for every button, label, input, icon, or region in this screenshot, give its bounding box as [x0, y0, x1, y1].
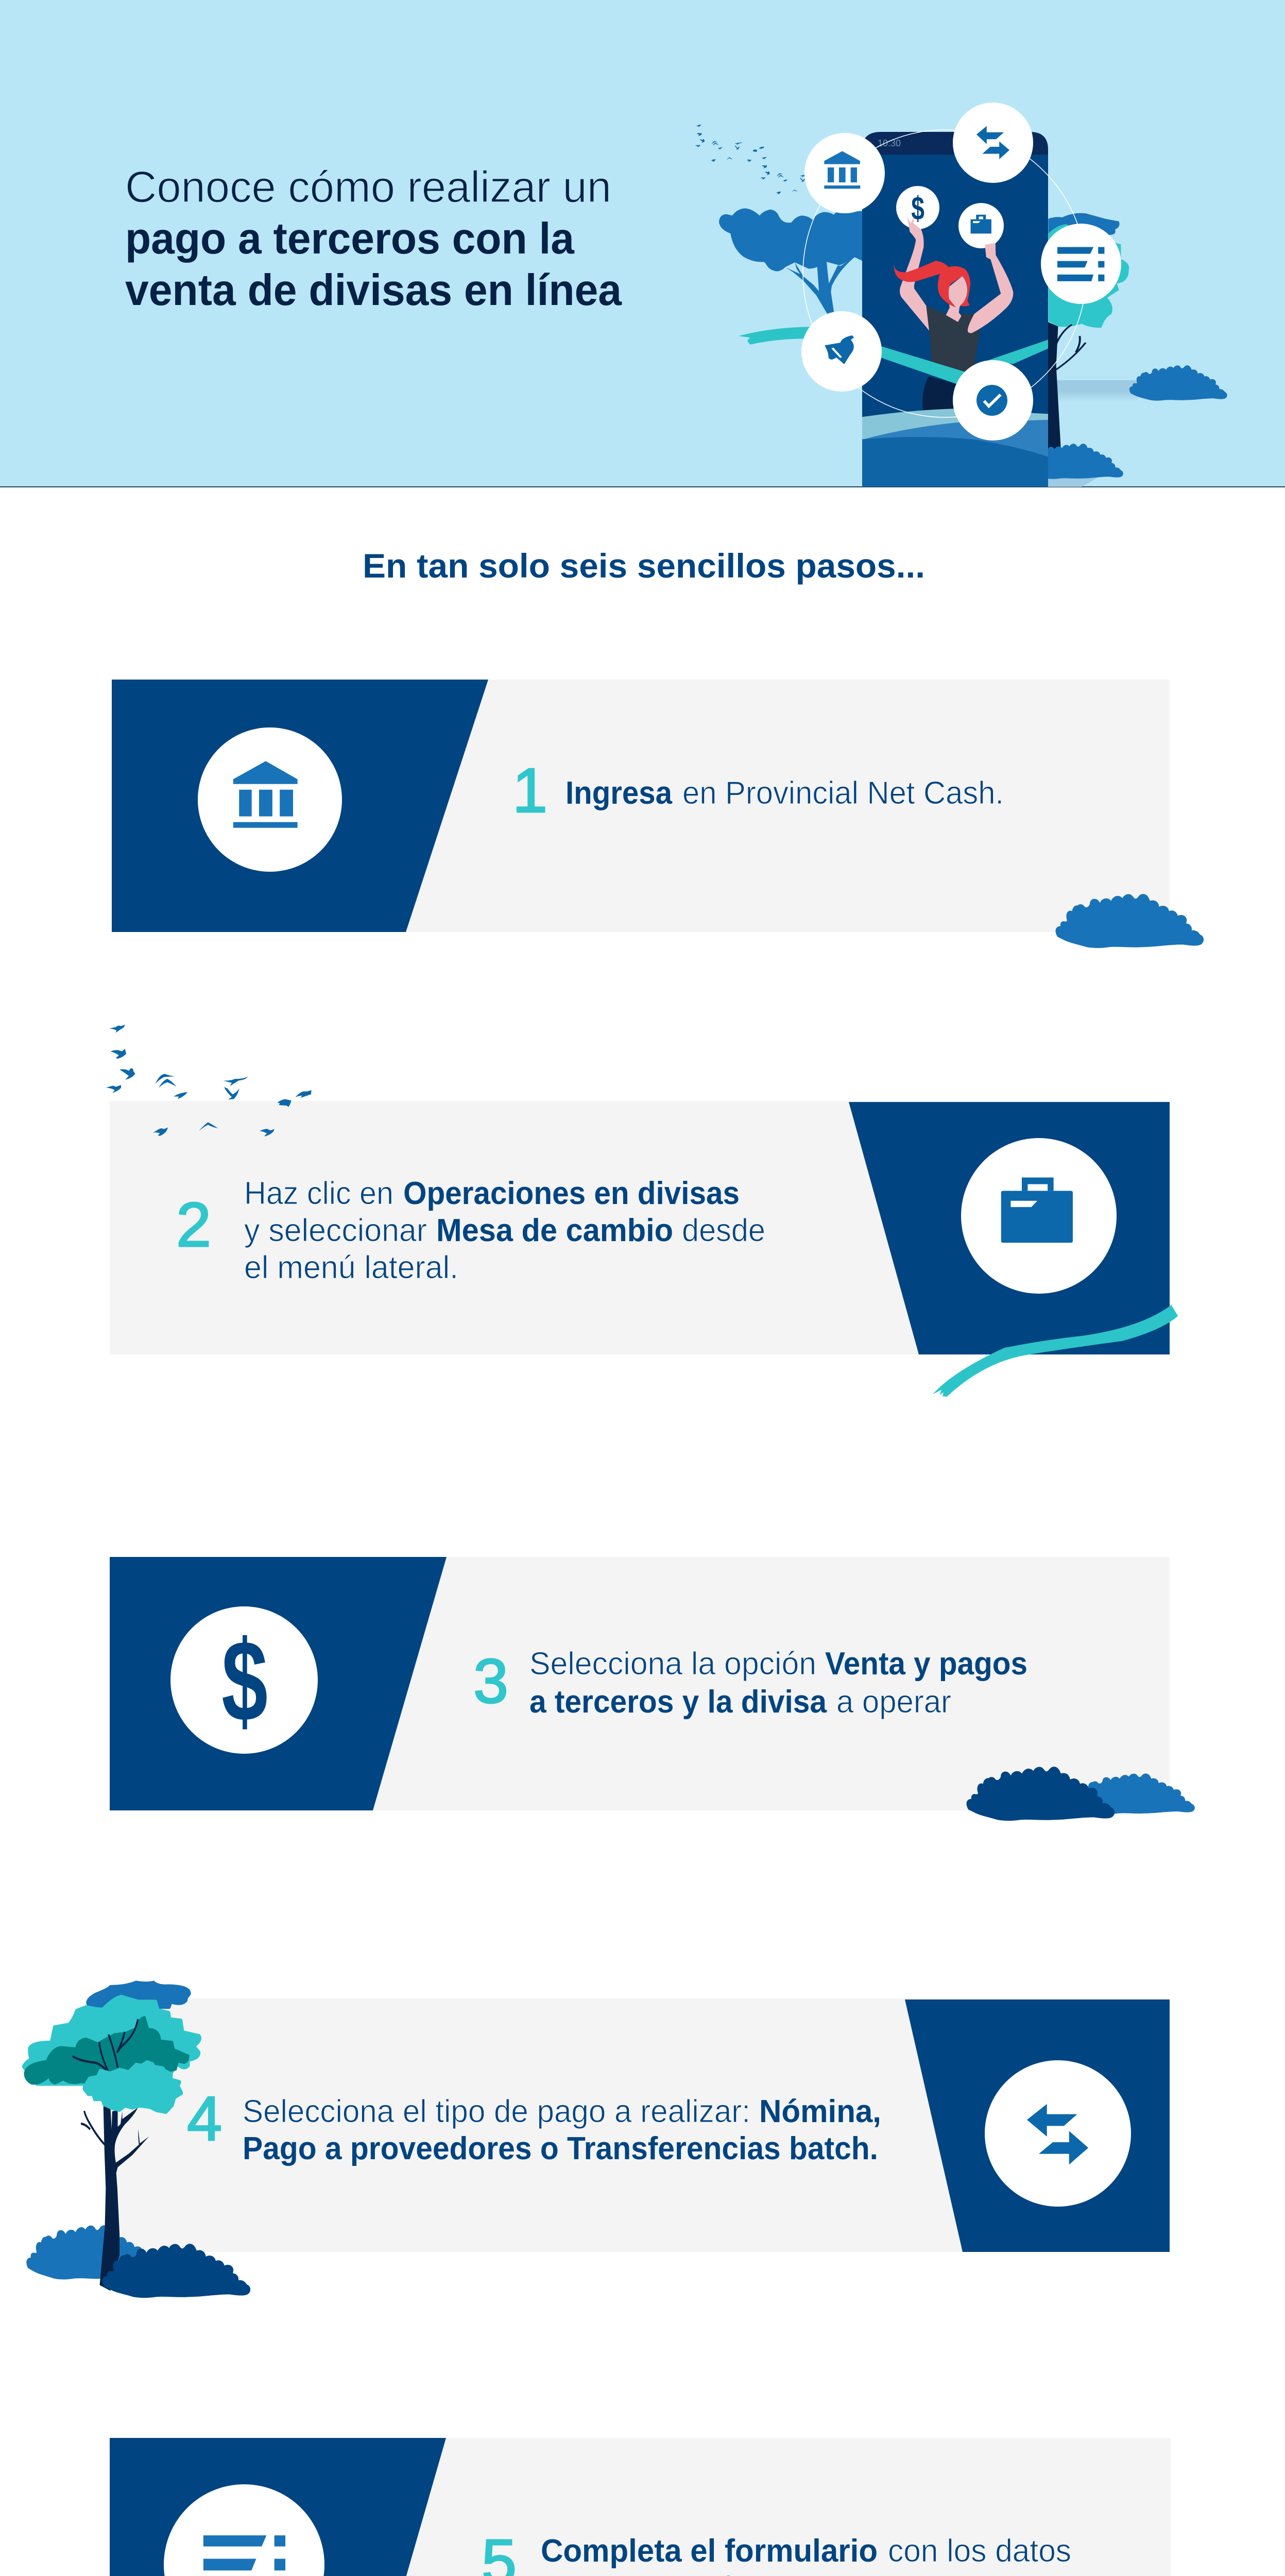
- person pants: [922, 377, 956, 411]
- step 3 text: a operar: [836, 1684, 951, 1720]
- step 5 background: [110, 2438, 1171, 2576]
- hills: [862, 409, 1048, 486]
- step 1 text: Ingresa: [566, 775, 672, 811]
- step 2 text: Haz clic en: [244, 1176, 393, 1211]
- step 2 text: y seleccionar: [244, 1213, 427, 1248]
- person hands in front of bubbles: [907, 216, 996, 259]
- bushes: [966, 1767, 1195, 1821]
- person: [862, 216, 1048, 486]
- icon: bell bubble: [801, 311, 882, 392]
- birds: [695, 125, 829, 194]
- orbit ring: [803, 130, 1086, 417]
- near bush: [1025, 444, 1123, 479]
- phone clock: 10:30: [878, 138, 901, 148]
- step 2 background: [110, 1101, 1170, 1354]
- icon: list bubble: [1041, 224, 1121, 304]
- step 2 text: Mesa de cambio: [436, 1213, 673, 1248]
- bush: [1055, 894, 1204, 948]
- step 2 text: el menú lateral.: [244, 1250, 458, 1285]
- icon: dollar bubble: $: [911, 190, 924, 227]
- step 4 number: 4: [187, 2083, 222, 2154]
- step 3 text: [529, 1646, 1027, 1720]
- step 2 text: [244, 1176, 765, 1285]
- step 4 text: Selecciona el tipo de pago a realizar:: [243, 2094, 750, 2129]
- subtitle: En tan solo seis sencillos pasos...: [363, 547, 925, 585]
- phone body: [862, 155, 1048, 487]
- center ribbon: [872, 340, 1048, 384]
- step 3 text: Selecciona la opción: [529, 1646, 816, 1682]
- step 4 navy block: [905, 1999, 1170, 2252]
- header divider: [0, 486, 1285, 487]
- left tree: [719, 208, 863, 314]
- icon: list: [164, 2484, 324, 2576]
- person top: [926, 306, 980, 372]
- step 4 text: Pago a proveedores o Transferencias batch.: [243, 2131, 878, 2166]
- step 2 text: Operaciones en divisas: [403, 1176, 740, 1211]
- step 5 navy block: [110, 2438, 446, 2576]
- header panel: [0, 0, 1285, 487]
- icon: arrows: [985, 2060, 1131, 2207]
- panel: step 5: [110, 2438, 1177, 2576]
- icon: dollar: [170, 1606, 318, 1754]
- title: Conoce cómo realizar un: [125, 163, 611, 212]
- step 5 text: [541, 2533, 1071, 2576]
- step 1 background: [112, 680, 1170, 932]
- step 3 number: 3: [473, 1646, 508, 1716]
- step 3 text: Venta y pagos: [825, 1646, 1027, 1682]
- step 1 text: en Provincial Net Cash.: [682, 775, 1004, 811]
- person face and neck: [946, 276, 967, 322]
- step 4 text: Nómina,: [759, 2094, 881, 2129]
- panel: step 2: [106, 1025, 1178, 1397]
- icon: arrows bubble: [953, 103, 1033, 183]
- phone status bar: [862, 132, 1048, 155]
- step 2 text: desde: [682, 1213, 765, 1248]
- right tree: [1047, 213, 1129, 449]
- icon: bank: [198, 727, 342, 872]
- icon: check bubble: [953, 360, 1033, 440]
- step 3 background: [110, 1557, 1170, 1810]
- far bush: [1129, 365, 1227, 401]
- title: venta de divisas en línea: [125, 266, 622, 315]
- step 4 background: [110, 1998, 1170, 2252]
- person right arm: [968, 243, 1013, 333]
- icon: dollar bubble: [896, 186, 939, 229]
- illustration: phone, person and icons: [695, 103, 1227, 487]
- panel: step 1: [112, 680, 1204, 948]
- step 3 navy block: [110, 1557, 447, 1810]
- title: [125, 163, 622, 315]
- panel: step 3: [110, 1557, 1195, 1821]
- step 2 number: 2: [176, 1190, 211, 1260]
- birds: [106, 1025, 312, 1137]
- left ribbon: [739, 327, 812, 345]
- panel: step 4: [24, 1982, 1170, 2298]
- icon: dollar: $: [221, 1617, 268, 1745]
- step 1 navy block: [112, 680, 488, 932]
- step 1 number: 1: [512, 755, 547, 825]
- title: pago a terceros con la: [125, 214, 575, 263]
- step 5 text: con los datos: [888, 2533, 1071, 2569]
- person hair: [894, 261, 970, 308]
- step 4 text: [243, 2094, 881, 2166]
- tree and bushes: [24, 1982, 250, 2298]
- person left arm: [900, 216, 929, 331]
- step 5 text: Completa el formulario: [541, 2533, 878, 2569]
- icon: briefcase bubble: [958, 203, 1004, 248]
- icon: bank bubble: [804, 133, 885, 213]
- header background: [0, 0, 1285, 487]
- ground shadow: [1056, 380, 1138, 402]
- step 2 navy block: [849, 1102, 1170, 1354]
- step 3 text: a terceros y la divisa: [529, 1684, 827, 1720]
- ribbon: [933, 1305, 1178, 1397]
- icon: briefcase: [961, 1138, 1117, 1294]
